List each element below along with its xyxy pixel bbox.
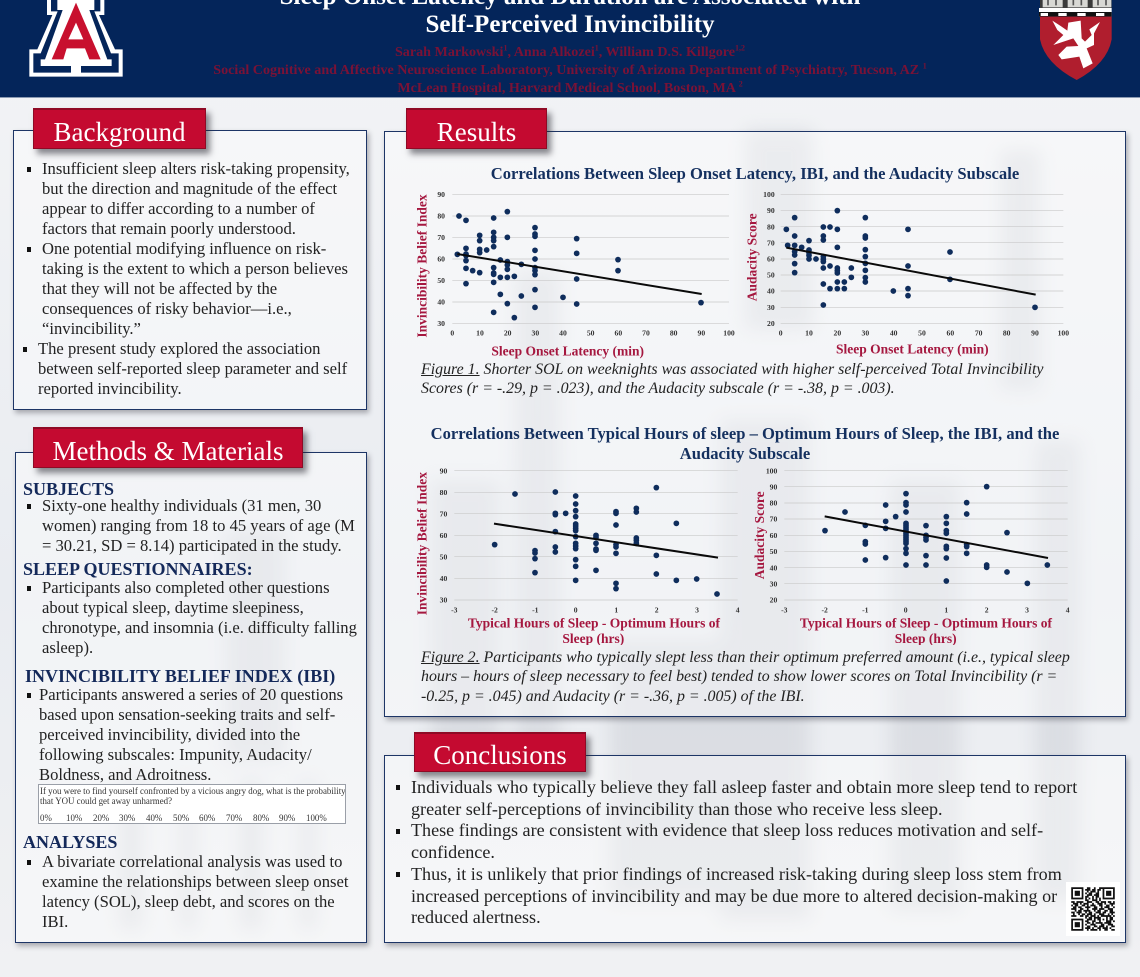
scatter chart: audacity vs sleep debt: 70	[770, 515, 778, 524]
heading: Background	[33, 108, 206, 149]
scatter chart: audacity vs sleep debt: 30	[770, 579, 778, 588]
scatter chart: IBI vs sleep debt: 60	[440, 531, 448, 540]
scatter chart: audacity vs sleep debt: 1	[944, 606, 948, 615]
scatter chart: audacity vs sleep onset latency: 10	[805, 328, 813, 337]
background bullet text: Insufficient sleep alters risk-taking propensity, but the direction and magnitude of the effect appear to differ according to a number of factors that remain poorly understood.	[42, 159, 350, 238]
scatter chart: IBI vs sleep onset latency: 50	[587, 328, 595, 337]
sample IBI question box: If you were to find yourself confronted by a vicious angry dog, what is the probability that YOU could get away unharmed?	[40, 786, 346, 806]
panel: conclusions	[384, 755, 1126, 943]
panel: results	[384, 131, 1126, 717]
scatter chart: audacity vs sleep debt: 40	[770, 563, 778, 572]
scatter chart: IBI vs sleep onset latency: 30	[532, 328, 539, 337]
scatter chart: IBI vs sleep onset latency: 90	[437, 190, 445, 199]
scatter chart: IBI vs sleep debt: 80	[440, 488, 448, 497]
heading: Background: Background	[54, 117, 185, 147]
scatter chart: IBI vs sleep debt: 90	[440, 466, 448, 475]
scatter chart: IBI vs sleep debt: 1	[614, 606, 618, 615]
scatter chart: audacity vs sleep debt	[752, 466, 1070, 645]
scatter chart: IBI vs sleep onset latency: 10	[476, 328, 484, 337]
invincibility belief index section: INVINCIBILITY BELIEF INDEX (IBI)	[25, 666, 335, 686]
scatter chart: audacity vs sleep onset latency: 70	[975, 328, 983, 337]
sample IBI question box: 100%	[306, 813, 327, 823]
scatter chart: IBI vs sleep onset latency: 70	[642, 328, 650, 337]
scatter chart: IBI vs sleep debt: 2	[655, 606, 659, 615]
scatter chart: audacity vs sleep onset latency: 100	[1058, 328, 1069, 337]
scatter chart: audacity vs sleep debt: 60	[770, 531, 778, 540]
scatter chart: IBI vs sleep debt: 0	[574, 606, 578, 615]
heading: Results: Results	[437, 117, 516, 147]
conclusions bullet text: Thus, it is unlikely that prior findings of increased risk-taking during sleep loss stem from increased perceptions of invincibility and may be due more to altered decision-making or reduced alertness.	[411, 864, 1062, 927]
scatter chart: IBI vs sleep onset latency: 60	[437, 255, 445, 264]
sample IBI question box: 20%	[93, 813, 109, 823]
subjects section: SUBJECTS	[23, 479, 114, 499]
scatter chart: audacity vs sleep debt: -2	[821, 606, 828, 615]
sample IBI question box: 40%	[146, 813, 162, 823]
sample IBI question box: 70%	[226, 813, 242, 823]
scatter chart: audacity vs sleep debt: 100	[766, 466, 778, 475]
icon: University of Arizona logo	[29, 0, 123, 77]
scatter chart: audacity vs sleep onset latency: 20	[834, 328, 841, 337]
scatter chart: audacity vs sleep onset latency: Audacity Score	[745, 213, 760, 301]
sample IBI question box: 10%	[66, 813, 82, 823]
sample IBI question box: 0%	[40, 813, 52, 823]
subjects section: Sixty-one healthy individuals (31 men, 30 women) ranging from 18 to 45 years of age (M = 30.21, SD = 8.14) participated in the study.	[42, 496, 355, 555]
scatter chart: audacity vs sleep onset latency: Sleep Onset Latency (min)	[836, 341, 989, 356]
scatter chart: IBI vs sleep debt: -2	[491, 606, 498, 615]
scatter chart: audacity vs sleep onset latency: 50	[918, 328, 926, 337]
scatter chart: audacity vs sleep debt: 0	[904, 606, 908, 615]
scatter chart: IBI vs sleep onset latency: Sleep Onset Latency (min)	[491, 344, 644, 359]
scatter chart: IBI vs sleep debt: 3	[695, 606, 699, 615]
scatter chart: audacity vs sleep onset latency: 50	[767, 271, 775, 280]
heading: Methods & Materials	[33, 427, 303, 468]
analyses section: ANALYSES	[23, 832, 117, 852]
conclusions bullet text: These findings are consistent with evidence that sleep loss reduces motivation and self- confidence.	[411, 820, 1043, 862]
scatter chart: IBI vs sleep debt: 70	[440, 509, 448, 518]
authors and affiliations: Sarah Markowski1, Anna Alkozei1, William D.S. Killgore1,2 Social Cognitive and Affective Neuroscience Laboratory, University of Arizona Department of Psychiatry, Tucson, AZ 1 McLean Hospital, Harvard Medical School, Boston, MA 2	[213, 43, 927, 96]
scatter chart: IBI vs sleep debt: 4	[736, 606, 740, 615]
sample IBI question box: 60%	[199, 813, 215, 823]
icon: QR code	[1066, 882, 1120, 936]
scatter chart: IBI vs sleep debt: Invincibility Belief Index	[415, 472, 430, 615]
scatter chart: IBI vs sleep onset latency: 90	[698, 328, 705, 337]
conclusions bullet text: Individuals who typically believe they fall asleep faster and obtain more sleep tend to report greater self-perceptions of invincibility than those who receive less sleep.	[411, 777, 1077, 819]
scatter chart: audacity vs sleep onset latency: 80	[1003, 328, 1011, 337]
sleep questionnaires section: SLEEP QUESTIONNAIRES:	[23, 559, 253, 579]
scatter chart: IBI vs sleep debt: Typical Hours of Sleep - Optimum Hours of	[468, 615, 721, 630]
scatter chart: audacity vs sleep onset latency: 60	[947, 328, 954, 337]
scatter chart: IBI vs sleep onset latency: 50	[437, 276, 445, 285]
chart title 2: Correlations Between Typical Hours of sleep – Optimum Hours of Sleep, the IBI, and the Audacity Subscale	[431, 424, 1059, 463]
figure 2 caption: Figure 2. Participants who typically slept less than their optimum preferred amount (i.e., typical sleep hours – hours of sleep necessary to feel best) tended to show lower scores on Total Invincibility (r = -0.25, p = .045) and Audacity (r = -.36, p = .005) of the IBI.	[421, 649, 1070, 705]
scatter chart: IBI vs sleep onset latency	[415, 190, 735, 359]
scatter chart: audacity vs sleep debt: 20	[770, 596, 778, 605]
icon: Harvard shield	[1039, 0, 1112, 80]
scatter chart: IBI vs sleep onset latency: 40	[559, 328, 567, 337]
analyses section: A bivariate correlational analysis was used to examine the relationships between sleep onset latency (SOL), sleep debt, and scores on the IBI.	[42, 852, 348, 931]
heading: Methods & Materials: Methods & Materials	[53, 436, 283, 466]
scatter chart: IBI vs sleep debt: -1	[532, 606, 539, 615]
scatter chart: audacity vs sleep onset latency: 40	[767, 287, 775, 296]
scatter chart: audacity vs sleep onset latency: 90	[1031, 328, 1039, 337]
invincibility belief index section: Participants answered a series of 20 questions based upon sensation-seeking traits and self- perceived invincibility, divided into the following subscales: Impunity, Audacity/ Boldness, and Adroitness.	[39, 685, 343, 784]
background bullet text: The present study explored the association between self-reported sleep parameter and self reported invincibility.	[38, 339, 347, 398]
sleep questionnaires section: Participants also completed other questions about typical sleep, daytime sleepiness, chronotype, and insomnia (i.e. difficulty falling asleep).	[42, 578, 357, 657]
conclusions bullet text	[396, 777, 1078, 927]
scatter chart: audacity vs sleep onset latency: 70	[767, 238, 775, 247]
panel: background	[13, 130, 367, 410]
sample IBI question box: 50%	[173, 813, 189, 823]
scatter chart: IBI vs sleep onset latency: 100	[723, 328, 735, 337]
scatter chart: IBI vs sleep debt: -3	[451, 606, 458, 615]
scatter chart: IBI vs sleep onset latency: 20	[504, 328, 512, 337]
scatter chart: audacity vs sleep debt: 2	[985, 606, 989, 615]
sample IBI question box	[38, 784, 346, 824]
scatter chart: IBI vs sleep onset latency: 80	[670, 328, 678, 337]
scatter chart: audacity vs sleep onset latency: 20	[767, 319, 775, 328]
scatter chart: IBI vs sleep onset latency: Invincibility Belief Index	[415, 194, 430, 338]
background bullet text: One potential modifying influence on risk- taking is the extent to which a person believes that they will not be affected by the consequences of risky behavior—i.e., “invincibility.”	[42, 239, 348, 338]
scatter chart: audacity vs sleep onset latency: 40	[890, 328, 898, 337]
scatter chart: audacity vs sleep debt: 3	[1025, 606, 1029, 615]
scatter chart: IBI vs sleep debt: 50	[440, 552, 448, 561]
scatter chart: audacity vs sleep debt: 50	[770, 547, 778, 556]
scatter chart: audacity vs sleep debt: Audacity Score	[752, 491, 767, 579]
scatter chart: IBI vs sleep onset latency: 70	[437, 233, 445, 242]
scatter chart: IBI vs sleep onset latency: 80	[437, 212, 445, 221]
panel: methods and materials	[15, 452, 367, 943]
scatter chart: audacity vs sleep onset latency: 30	[862, 328, 869, 337]
sample IBI question box: 30%	[119, 813, 135, 823]
scatter chart: IBI vs sleep debt: 40	[440, 574, 448, 583]
scatter chart: IBI vs sleep debt: 30	[440, 596, 448, 605]
scatter chart: audacity vs sleep debt: Typical Hours of Sleep - Optimum Hours of	[800, 615, 1053, 630]
background bullet text	[23, 159, 350, 398]
scatter chart: audacity vs sleep onset latency: 90	[767, 206, 775, 215]
heading: Conclusions: Conclusions	[433, 740, 567, 770]
scatter chart: audacity vs sleep debt: 4	[1066, 606, 1070, 615]
scatter chart: IBI vs sleep onset latency: 60	[615, 328, 622, 337]
header band	[0, 0, 1140, 98]
scatter chart: IBI vs sleep onset latency: 30	[437, 319, 445, 328]
scatter chart: IBI vs sleep debt	[415, 466, 740, 645]
scatter chart: audacity vs sleep debt: 80	[770, 499, 778, 508]
scatter chart: audacity vs sleep onset latency: 100	[763, 190, 775, 199]
scatter chart: audacity vs sleep onset latency: 80	[767, 222, 775, 231]
scatter chart: audacity vs sleep onset latency	[745, 190, 1069, 356]
sample IBI question box: 80%	[253, 813, 269, 823]
figure 1 caption: Figure 1. Shorter SOL on weeknights was associated with higher self-perceived Total Invincibility Scores (r = -.29, p = .023), and the Audacity subscale (r = -.38, p = .003).	[421, 361, 1043, 397]
sample IBI question box: 90%	[279, 813, 295, 823]
scatter chart: audacity vs sleep onset latency: 0	[779, 328, 783, 337]
chart title 1: Correlations Between Sleep Onset Latency, IBI, and the Audacity Subscale	[491, 164, 1019, 183]
heading: Results	[406, 108, 547, 149]
scatter chart: audacity vs sleep debt: -1	[862, 606, 869, 615]
heading: Conclusions	[414, 732, 586, 772]
scatter chart: audacity vs sleep onset latency: 60	[767, 255, 775, 264]
scatter chart: IBI vs sleep onset latency: 40	[437, 298, 445, 307]
scatter chart: audacity vs sleep onset latency: 30	[767, 303, 775, 312]
scatter chart: IBI vs sleep onset latency: 0	[450, 328, 454, 337]
scatter chart: audacity vs sleep debt: 90	[770, 482, 778, 491]
scatter chart: audacity vs sleep debt: -3	[781, 606, 788, 615]
